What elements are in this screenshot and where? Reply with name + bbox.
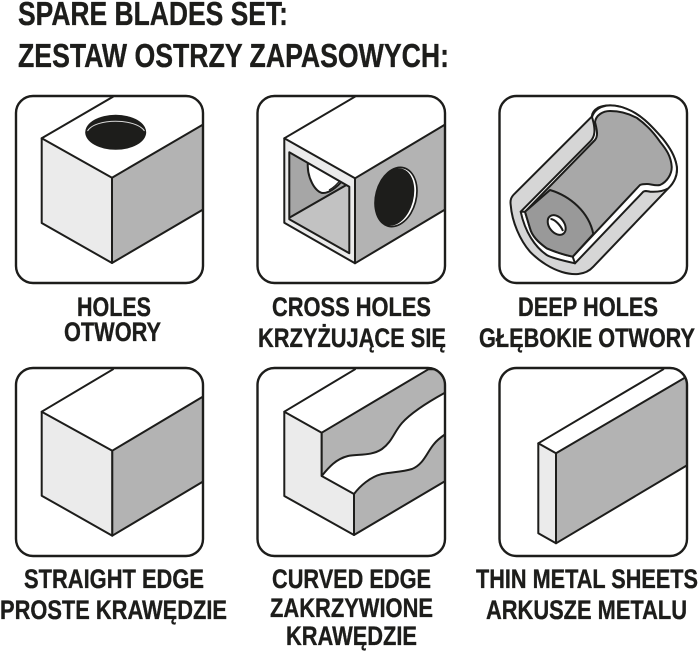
label: curved edge xyxy=(270,564,433,651)
interior xyxy=(525,111,672,257)
panel: thin metal sheets xyxy=(500,368,690,556)
label: holes: OTWORY xyxy=(64,317,161,347)
title xyxy=(18,0,449,74)
label: deep holes: DEEP HOLES xyxy=(518,292,658,322)
panel: straight edge xyxy=(16,368,204,556)
label: straight edge: PROSTE KRAWĘDZIE xyxy=(0,595,227,625)
label: deep holes xyxy=(479,292,695,353)
label: straight edge xyxy=(0,564,227,625)
icon: side hole xyxy=(368,162,424,232)
panel: cross holes xyxy=(258,96,446,283)
label: cross holes: CROSS HOLES xyxy=(272,292,431,322)
rim corner ticks xyxy=(521,212,575,263)
icon: small hole xyxy=(544,212,569,238)
label: curved edge: CURVED EDGE xyxy=(272,564,431,594)
panel: curved edge xyxy=(258,368,450,556)
label: cross holes: KRZYŻUJĄCE SIĘ xyxy=(258,323,446,353)
outer cylinder wall xyxy=(510,105,677,274)
icon: round hole xyxy=(85,115,146,150)
label: cross holes xyxy=(258,292,446,353)
label: holes xyxy=(64,292,161,347)
label: curved edge: KRAWĘDZIE xyxy=(286,621,417,651)
white rim xyxy=(521,105,677,263)
back disc xyxy=(525,190,593,257)
label: straight edge: STRAIGHT EDGE xyxy=(24,564,204,594)
square opening xyxy=(289,152,349,253)
label: thin metal sheets xyxy=(476,564,698,625)
panel: holes xyxy=(16,96,204,283)
title: ZESTAW OSTRZY ZAPASOWYCH: xyxy=(18,37,449,74)
panel: deep holes xyxy=(500,96,687,283)
label: holes: HOLES xyxy=(77,292,151,322)
label: curved edge: ZAKRZYWIONE xyxy=(270,593,433,623)
